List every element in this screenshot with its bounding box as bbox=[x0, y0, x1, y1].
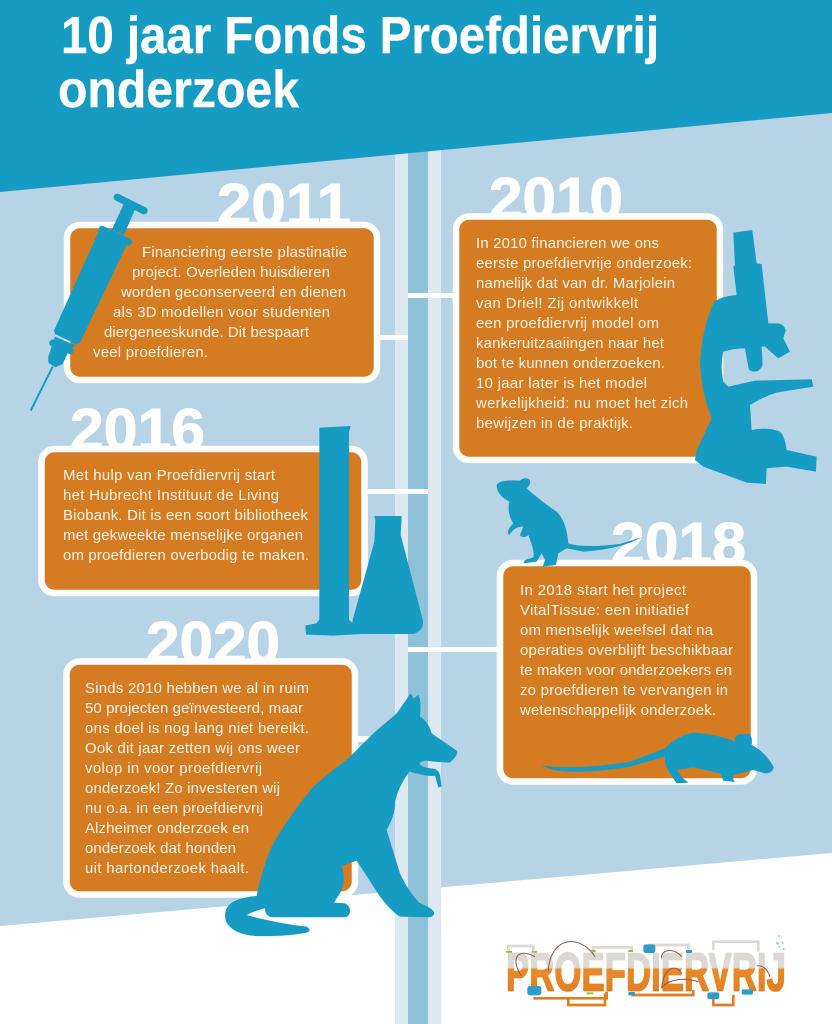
text 2020: nu o.a. in een proefdiervrij bbox=[85, 801, 263, 817]
text 2011 bbox=[93, 245, 347, 361]
year 2016: 2016 bbox=[70, 397, 205, 463]
icon: walking mouse bbox=[541, 733, 774, 783]
text 2010: een proefdiervrij model om bbox=[476, 316, 659, 332]
text 2016: met gekweekte menselijke organen bbox=[63, 528, 303, 544]
icon: flask bbox=[353, 517, 422, 633]
text 2011: veel proefdieren. bbox=[93, 345, 208, 361]
icon: dog bbox=[225, 693, 457, 936]
icon: standing rat bbox=[497, 478, 642, 567]
text 2018: te maken voor onderzoekers en bbox=[520, 663, 732, 679]
text 2016: Biobank. Dit is een soort bibliotheek bbox=[63, 508, 309, 524]
panel: 2010 bbox=[456, 166, 720, 460]
text 2018 bbox=[519, 583, 733, 719]
icon: microscope bbox=[695, 230, 817, 484]
title: 10 jaar Fonds Proefdiervrij bbox=[61, 7, 659, 65]
text 2011: Financiering eerste plastinatie bbox=[142, 245, 347, 261]
text 2016: om proefdieren overbodig te maken. bbox=[63, 548, 309, 564]
text 2018: zo proefdieren te vervangen in bbox=[520, 683, 728, 699]
text 2010 bbox=[475, 236, 692, 432]
connector lines bbox=[357, 293, 498, 742]
text 2020: onderzoek! Zo investeren wij bbox=[85, 781, 280, 797]
panel: 2016 bbox=[42, 397, 364, 593]
text 2020: volop in voor proefdiervrij bbox=[85, 761, 262, 777]
text 2020: uit hartonderzoek haalt. bbox=[85, 861, 249, 877]
text 2020: ons doel is nog lang niet bereikt. bbox=[85, 721, 309, 737]
year 2010: 2010 bbox=[489, 166, 623, 232]
text 2016: Met hulp van Proefdiervrij start bbox=[63, 468, 276, 484]
icon: graduated cylinder bbox=[306, 427, 362, 635]
text 2018: VitalTissue: een initiatief bbox=[520, 603, 690, 619]
white bottom area bbox=[0, 853, 832, 1024]
text 2018: operaties overblijft beschikbaar bbox=[520, 643, 733, 659]
panel: 2018 bbox=[500, 511, 754, 782]
text 2011: als 3D modellen voor studenten bbox=[113, 305, 330, 321]
text 2010: bewijzen in de praktijk. bbox=[476, 416, 633, 432]
text 2010: werkelijkheid: nu moet het zich bbox=[475, 396, 688, 412]
title: onderzoek bbox=[58, 61, 299, 119]
text 2010: bot te kunnen onderzoeken. bbox=[476, 356, 665, 372]
card 2011 bbox=[67, 225, 377, 380]
timeline spine bbox=[395, 140, 441, 1024]
text 2010: van Driel! Zij ontwikkelt bbox=[476, 296, 639, 312]
panel: 2011 bbox=[67, 172, 377, 380]
text 2016: het Hubrecht Instituut de Living bbox=[63, 488, 279, 504]
text 2020 bbox=[85, 681, 309, 877]
text 2011: project. Overleden huisdieren bbox=[132, 265, 330, 281]
icon: syringe bbox=[31, 197, 144, 411]
text 2020: onderzoek dat honden bbox=[85, 841, 236, 857]
year 2020: 2020 bbox=[146, 610, 280, 676]
text 2011: diergeneeskunde. Dit bespaart bbox=[104, 325, 310, 341]
year 2018: 2018 bbox=[611, 511, 746, 577]
text 2020: 50 projecten geïnvesteerd, maar bbox=[85, 701, 303, 717]
panel: 2020 bbox=[66, 610, 355, 894]
text 2018: In 2018 start het project bbox=[520, 583, 687, 599]
text 2010: eerste proefdiervrije onderzoek: bbox=[476, 256, 692, 272]
year 2011: 2011 bbox=[217, 172, 351, 238]
text 2010: namelijk dat van dr. Marjolein bbox=[476, 276, 675, 292]
text 2020: Alzheimer onderzoek en bbox=[85, 821, 249, 837]
title bbox=[58, 7, 659, 119]
text 2016 bbox=[63, 468, 309, 564]
card 2020 bbox=[66, 662, 355, 894]
text 2010: kankeruitzaaiingen naar het bbox=[476, 336, 665, 352]
card 2010 bbox=[456, 216, 720, 460]
text 2010: 10 jaar later is het model bbox=[476, 376, 647, 392]
header band bbox=[0, 0, 832, 192]
text 2010: In 2010 financieren we ons bbox=[476, 236, 659, 252]
text 2020: Sinds 2010 hebben we al in ruim bbox=[85, 681, 309, 697]
text 2018: om menselijk weefsel dat na bbox=[520, 623, 714, 639]
text 2020: Ook dit jaar zetten wij ons weer bbox=[85, 741, 300, 757]
card 2018 bbox=[500, 563, 754, 782]
card 2016 bbox=[42, 449, 364, 593]
text 2011: worden geconserveerd en dienen bbox=[120, 285, 346, 301]
text 2018: wetenschappelijk onderzoek. bbox=[519, 703, 716, 719]
